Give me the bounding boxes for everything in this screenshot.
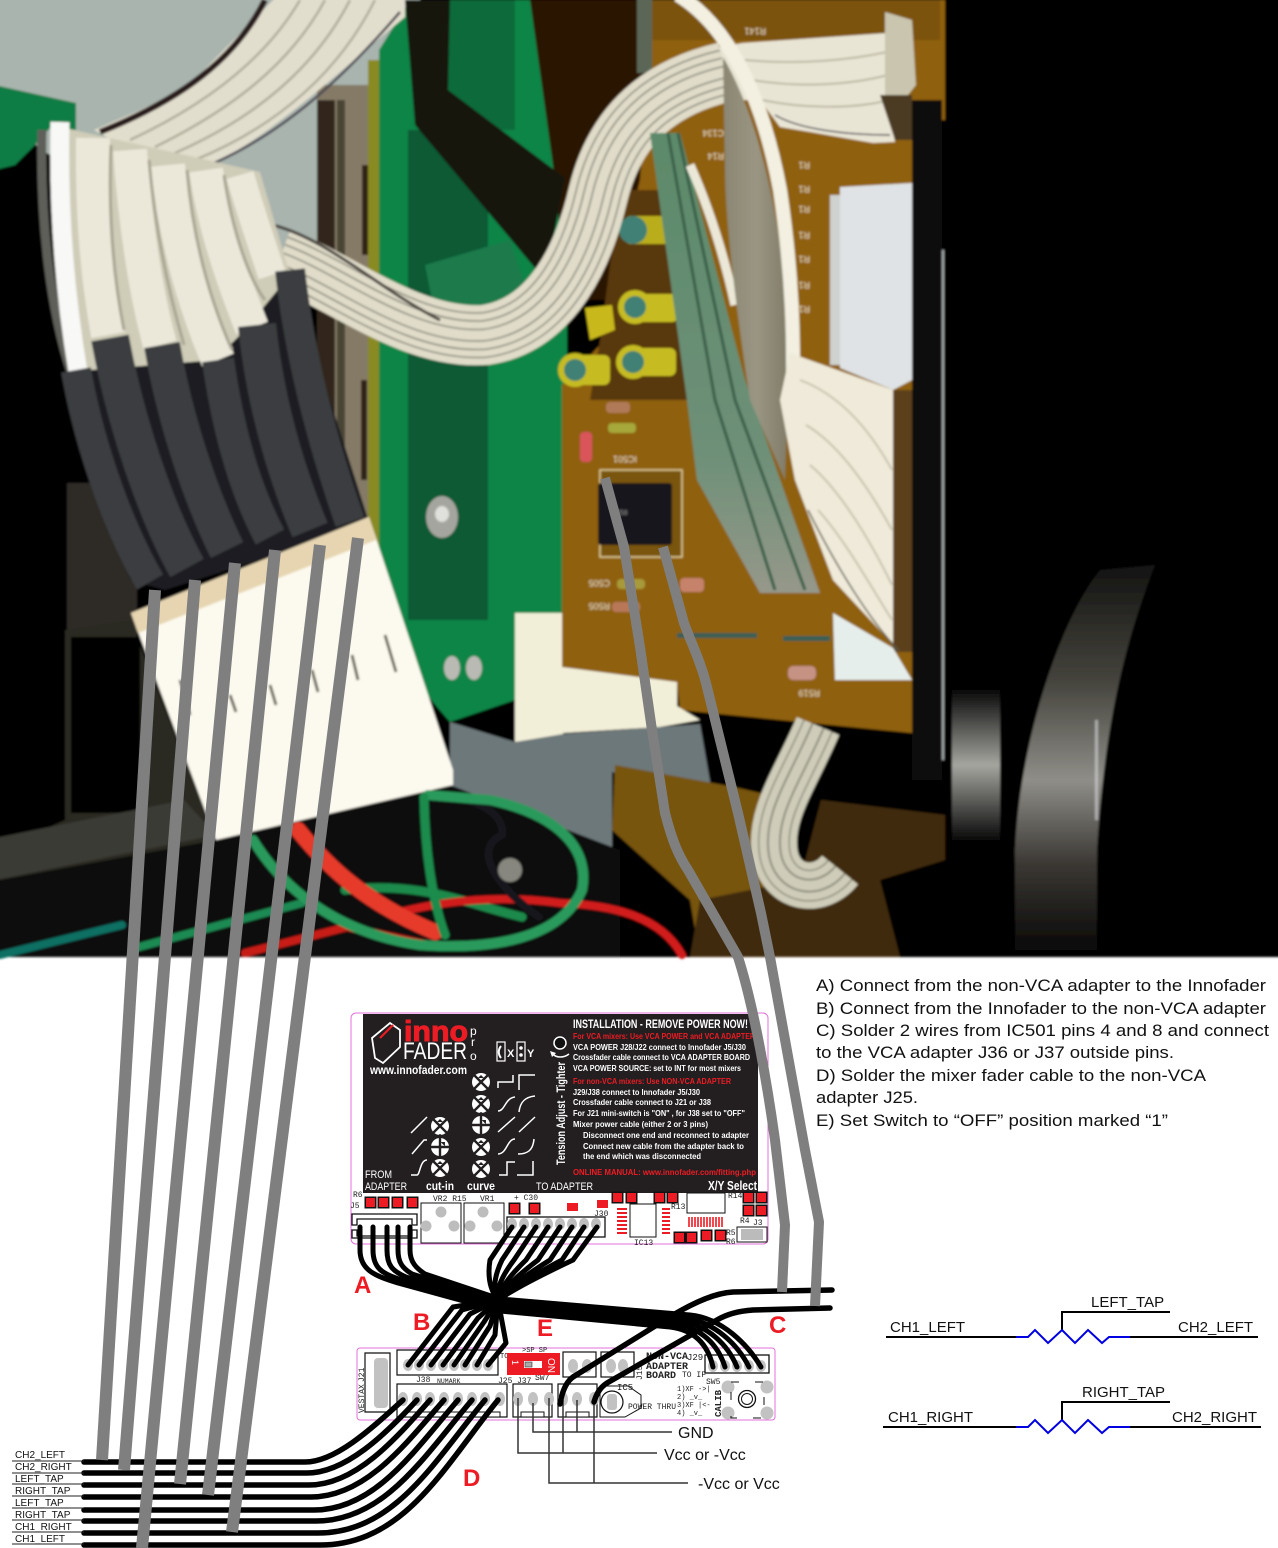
board name — [636, 1352, 711, 1418]
connector J25 — [397, 1377, 513, 1417]
power pin leader lines — [518, 1398, 688, 1483]
IC5 regulator — [600, 1383, 676, 1417]
logo: p — [470, 1024, 477, 1038]
green circuit board — [379, 0, 567, 722]
connector J38: NUMARK — [437, 1378, 461, 1385]
cable labels — [12, 1450, 84, 1545]
board markings: R1 — [798, 280, 810, 290]
IC501 chip: 4558 — [612, 510, 628, 517]
small jumper boxes — [500, 1347, 634, 1377]
separated white strands — [60, 122, 272, 372]
board name: TO IF — [682, 1371, 706, 1380]
tension label: Tension Adjust - Tighter — [554, 1062, 568, 1165]
installation text: For non-VCA mixers: Use NON-VCA ADAPTER — [573, 1077, 731, 1086]
grey chassis background — [0, 0, 420, 290]
schematic: right channel potentiometer — [883, 1384, 1261, 1433]
panel bottom labels: TO ADAPTER — [536, 1181, 593, 1193]
gold circuit board — [562, 0, 945, 733]
installation text: For VCA mixers: Use VCA POWER and VCA ADAPTER — [573, 1032, 755, 1041]
red mini switch — [507, 1353, 560, 1375]
board markings: R1 — [798, 204, 810, 214]
installation text — [573, 1017, 756, 1177]
dark board area top centre — [530, 0, 700, 300]
cable labels: CH1_LEFT — [15, 1534, 65, 1545]
tension knob and arrow — [550, 1037, 569, 1057]
installation text: VCA POWER SOURCE: set to INT for most mixers — [573, 1064, 741, 1073]
connector J29: SW5 — [706, 1378, 721, 1387]
white plastic clip — [515, 613, 700, 742]
X/Y jumper icons: Y — [527, 1048, 535, 1060]
logo: r — [471, 1035, 475, 1049]
large grey ribbon arch — [723, 57, 790, 480]
overlay wires: connector to cable — [102, 538, 358, 1548]
black heat-shrink tubes — [76, 270, 350, 582]
black housing — [912, 100, 942, 780]
board outline — [351, 1013, 768, 1244]
installation text: ONLINE MANUAL: www.innofader.com/fitting.php — [573, 1168, 756, 1177]
instructions text block: D) Solder the mixer fader cable to the non-VCA — [816, 1066, 1207, 1085]
instructions text block: A) Connect from the non-VCA adapter to the Innofader — [816, 976, 1266, 995]
label: E: E — [537, 1315, 553, 1342]
schematic: right channel potentiometer: RIGHT_TAP — [1082, 1384, 1165, 1401]
label: D: D — [463, 1465, 480, 1492]
overlay wires: IC501 pins — [605, 478, 819, 1306]
cable labels: CH2_LEFT — [15, 1450, 65, 1461]
ribbon curving through the centre — [280, 72, 725, 335]
board designators: R4 — [740, 1217, 750, 1226]
label: C: C — [769, 1312, 786, 1339]
logo: www.innofader.com — [369, 1063, 467, 1077]
installation text: J29/J38 connect to Innofader J5/J30 — [573, 1088, 701, 1097]
cable labels: LEFT_TAP — [15, 1474, 64, 1485]
backing behind heat-shrink — [65, 275, 370, 590]
board name: 3)XF |<- — [677, 1402, 711, 1410]
installation text: Disconnect one end and reconnect to adapter — [583, 1131, 749, 1140]
red mini switch: 1 — [510, 1360, 520, 1365]
connector J25: J25 — [498, 1377, 513, 1386]
tan metal column — [317, 85, 370, 585]
board markings: C505 — [588, 578, 610, 588]
IC5 regulator: IC5 — [617, 1383, 633, 1393]
panel: non-VCA adapter board — [357, 1347, 775, 1420]
board markings: R1 — [798, 230, 810, 240]
board markings: R505 — [588, 601, 610, 611]
instructions text block — [816, 976, 1269, 1130]
board designators: J3 — [753, 1219, 763, 1228]
white connector right — [840, 183, 912, 390]
board markings: IC501 — [613, 454, 637, 464]
cable labels: CH1_RIGHT — [15, 1522, 72, 1533]
cable labels: RIGHT_TAP — [15, 1510, 71, 1521]
ribbon top left — [94, 0, 405, 167]
logo — [369, 1016, 477, 1077]
installation text: Mixer power cable (either 2 or 3 pins) — [573, 1120, 708, 1129]
cable labels: RIGHT_TAP — [15, 1486, 71, 1497]
panel bottom labels: ADAPTER — [365, 1181, 407, 1193]
logo: FADER — [403, 1038, 467, 1065]
white connector block — [131, 517, 453, 840]
metal disc — [1015, 565, 1155, 950]
grey wire top centre — [637, 0, 652, 73]
black ribbon — [405, 0, 565, 280]
schematic: left channel potentiometer: CH2_LEFT — [1178, 1319, 1253, 1336]
schematic: right channel potentiometer: CH1_RIGHT — [888, 1409, 973, 1426]
installation text: INSTALLATION - REMOVE POWER NOW! — [573, 1017, 748, 1031]
small jumper boxes: >SP SP — [522, 1347, 547, 1355]
connector J38 — [397, 1350, 498, 1385]
white ribbon fan — [780, 353, 900, 652]
installation text: Crossfader cable connect to J21 or J38 — [573, 1098, 712, 1107]
connector J30 — [507, 1217, 605, 1237]
board designators: R5 — [726, 1229, 736, 1238]
logo: o — [470, 1049, 477, 1063]
green board corner — [0, 85, 76, 170]
wires B: J30 to J38 — [408, 1227, 597, 1365]
board name: 2) _v_ — [677, 1394, 703, 1402]
panel: Innofader board — [350, 1013, 768, 1248]
panel bottom labels: X/Y Select — [708, 1178, 758, 1193]
thin grey wire left — [42, 130, 72, 375]
board name: 1)XF ->| — [677, 1386, 711, 1394]
board name: ADAPTER — [646, 1362, 688, 1373]
schematic: right channel potentiometer: CH2_RIGHT — [1172, 1409, 1257, 1426]
X/Y jumper icons — [497, 1042, 535, 1061]
wires C: IC501 leads to J36 — [560, 1290, 832, 1404]
brown strip beside fan — [893, 390, 912, 652]
board markings: R1 — [798, 304, 810, 314]
board markings: R1 — [798, 254, 810, 264]
installation text: For J21 mini-switch is "ON" , for J38 set to "OFF" — [573, 1109, 745, 1118]
schematic: left channel potentiometer — [886, 1294, 1258, 1343]
connector J21: J21 — [358, 1367, 367, 1382]
label: A: A — [354, 1272, 371, 1299]
black instruction panel — [363, 1014, 758, 1193]
trim pot icons — [427, 1073, 494, 1178]
calibrate button: CALIB — [714, 1389, 724, 1417]
instructions text block: B) Connect from the Innofader to the non-VCA adapter — [816, 999, 1266, 1018]
instructions text block: adapter J25. — [816, 1088, 918, 1107]
board name: 4) _v_ — [677, 1410, 703, 1418]
wires D: fader cable to J25 — [84, 1400, 498, 1545]
label: GND: GND — [678, 1425, 714, 1442]
connector J37 and J36: J37 — [517, 1377, 532, 1386]
small white connector top right — [885, 12, 916, 105]
installation text: VCA POWER J28/J22 connect to Innofader J5/J30 — [573, 1043, 746, 1052]
capacitors — [558, 216, 678, 387]
panel bottom labels — [365, 1169, 758, 1193]
board markings: C134 — [702, 128, 724, 138]
instructions text block: C) Solder 2 wires from IC501 pins 4 and 8 and connect — [816, 1021, 1269, 1040]
lower left dark area — [67, 483, 137, 643]
board name: J15 — [636, 1365, 645, 1380]
ribbon upper right — [690, 33, 895, 143]
panel bottom labels: cut-in — [426, 1179, 454, 1193]
red mini switch: ON — [545, 1358, 556, 1373]
board designators: J5 — [350, 1202, 360, 1211]
X/Y jumper icons: X — [507, 1048, 515, 1060]
board designators: R13 — [671, 1203, 686, 1212]
schematic: left channel potentiometer: LEFT_TAP — [1091, 1294, 1164, 1311]
board designators: R6 — [726, 1238, 736, 1247]
IC501 chip — [598, 470, 682, 557]
board components — [352, 1193, 767, 1243]
instructions text block: E) Set Switch to “OFF” position marked “1” — [816, 1111, 1168, 1130]
board designators: J30 — [594, 1210, 609, 1219]
board designators: IC13 — [634, 1239, 653, 1248]
schematic: left channel potentiometer: CH1_LEFT — [890, 1319, 965, 1336]
board markings: R1 — [798, 160, 810, 170]
silver screws — [426, 496, 458, 538]
board name: J29 — [687, 1353, 703, 1363]
label: Vcc or -Vcc: Vcc or -Vcc — [664, 1447, 746, 1464]
board designators: + C30 — [514, 1194, 538, 1203]
highlight line on black housing — [942, 250, 944, 760]
dark line on ribbon — [273, 225, 440, 320]
wires A: J5 to J29 — [360, 1227, 761, 1367]
cable labels: LEFT_TAP — [15, 1498, 64, 1509]
panel bottom labels: curve — [467, 1179, 495, 1193]
board markings — [588, 26, 820, 698]
resistors — [580, 432, 592, 462]
label: B: B — [413, 1309, 430, 1336]
lower gold board — [612, 765, 790, 957]
board markings: R519 — [798, 688, 820, 698]
connector J37 and J36 — [513, 1374, 599, 1417]
fader curve icons — [411, 1075, 535, 1175]
backing behind strands — [52, 125, 290, 372]
green-grey ribbon — [650, 133, 820, 593]
board markings: R14 — [707, 151, 724, 161]
red SMD pads — [364, 1192, 768, 1244]
IC5 regulator: POWER THRU — [628, 1403, 676, 1412]
label: -Vcc or Vcc: -Vcc or Vcc — [698, 1476, 780, 1493]
board designators: VR2 R15 — [433, 1195, 467, 1204]
connector J29 — [705, 1355, 769, 1387]
connector J21 — [358, 1353, 390, 1413]
calibrate button — [714, 1380, 774, 1420]
grey metal plate — [450, 722, 715, 850]
board designators — [350, 1191, 763, 1248]
loose wires — [0, 795, 682, 955]
small ribbon bottom — [774, 726, 840, 886]
board name: NON-VCA — [646, 1352, 688, 1363]
board designators: VR1 — [480, 1195, 495, 1204]
connector J38: J38 — [416, 1376, 431, 1385]
installation text: the end which was disconnected — [583, 1152, 701, 1161]
logo: inno — [404, 1016, 468, 1048]
instructions text block: to the VCA adapter J36 or J37 outside pins. — [816, 1043, 1174, 1062]
installation text: Crossfader cable connect to VCA ADAPTER BOARD — [573, 1053, 750, 1062]
small jumper boxes: TO — [500, 1353, 508, 1361]
board designators: R6 — [353, 1191, 363, 1200]
installation text: Connect new cable from the adapter back to — [583, 1142, 744, 1151]
connector J5 — [352, 1214, 417, 1238]
board markings: R141 — [744, 26, 766, 36]
connector J21: VESTAX — [358, 1384, 367, 1413]
photo: mixer interior — [0, 0, 1278, 957]
connector J37 and J36: SW7 — [535, 1374, 550, 1383]
board name: BOARD — [646, 1371, 676, 1382]
cable labels: CH2_RIGHT — [15, 1462, 72, 1473]
panel bottom labels: FROM — [365, 1169, 392, 1181]
board designators: R14 — [728, 1192, 743, 1201]
board markings: R1 — [798, 184, 810, 194]
